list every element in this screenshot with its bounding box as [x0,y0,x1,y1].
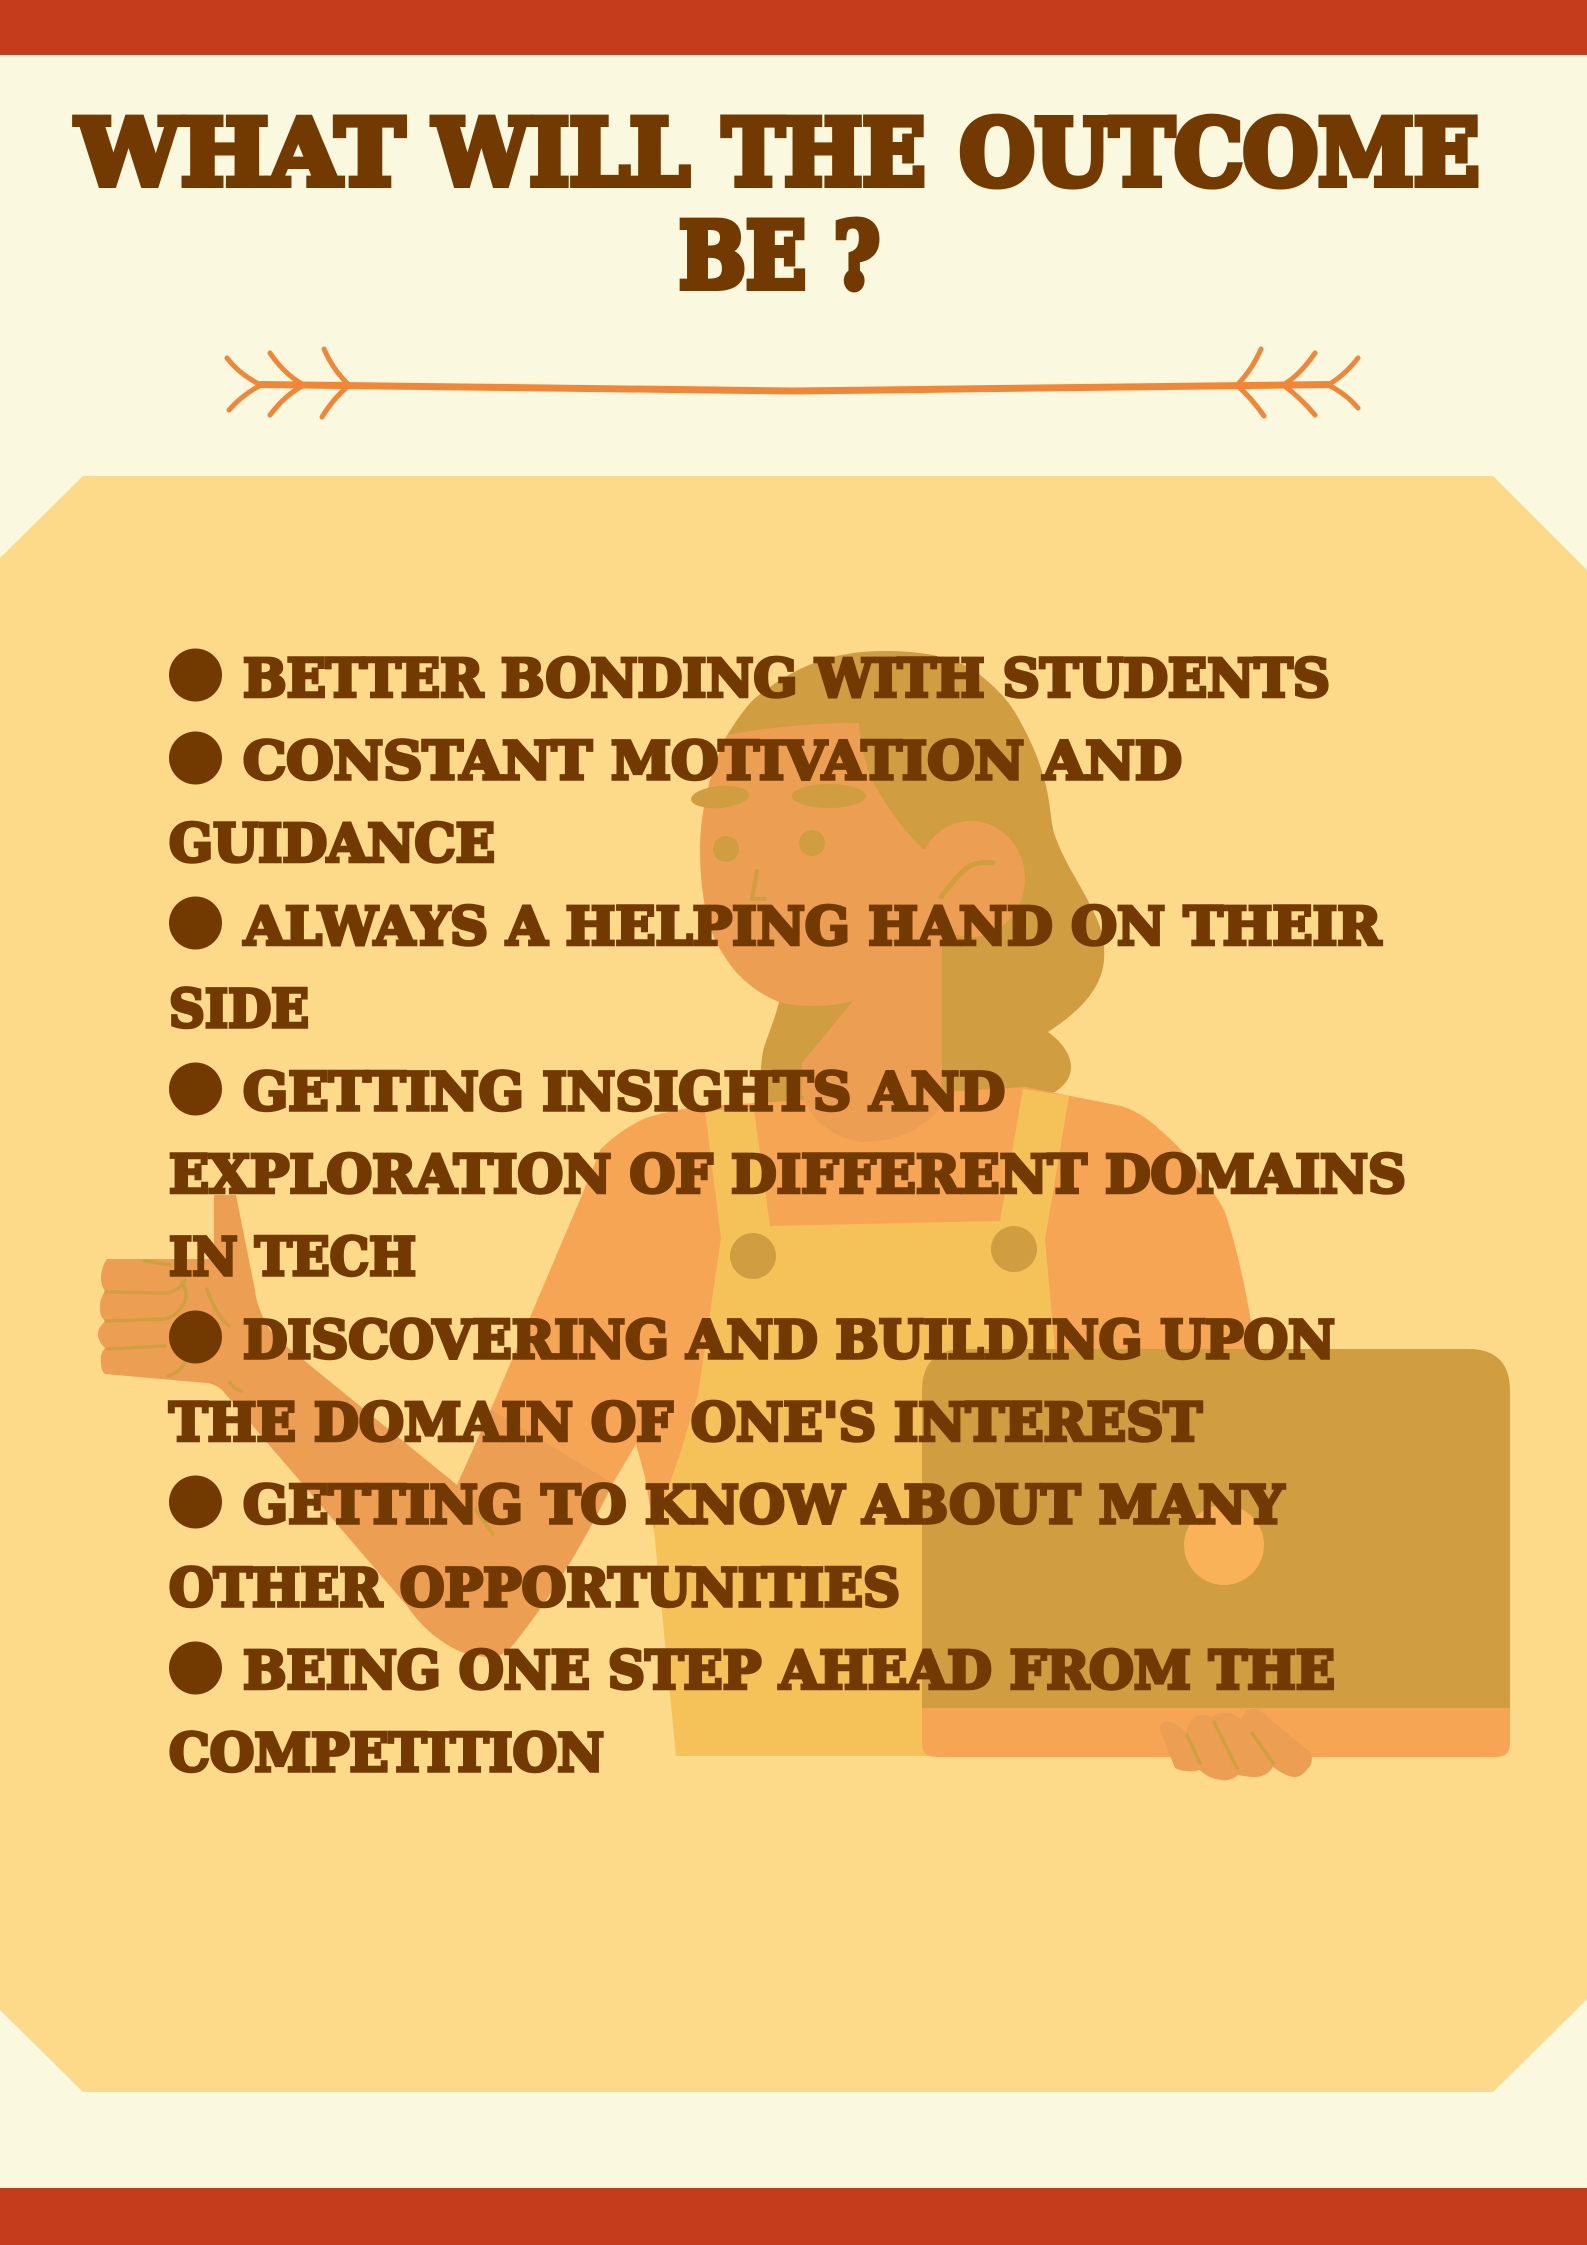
outcome list [169,648,1406,1784]
double-ended arrow divider [227,349,1358,417]
hair [725,651,1104,1110]
item: insights: EXPLORATION OF DIFFERENT DOMAINS [169,1144,1406,1206]
item: constant motivation: CONSTANT MOTIVATION AND [243,731,1182,792]
hand crease lines [106,1261,493,1534]
item: one step ahead: COMPETITION [169,1723,604,1784]
laptop [922,1349,1510,1757]
overalls [654,1089,1069,1756]
item: opportunities: GETTING TO KNOW ABOUT MANY [243,1475,1285,1536]
illustration: woman with laptop giving thumbs up [98,651,1510,1780]
overall buttons [730,1226,1037,1279]
ear [917,821,1025,937]
item: insights: IN TECH [169,1227,416,1288]
title: OUTCOME [960,100,1480,206]
item: discovering [169,1310,1335,1454]
title: THE [722,100,926,206]
hand holding laptop [1160,1709,1312,1780]
item: discovering: THE DOMAIN OF ONE'S INTEREST [169,1392,1202,1454]
shirt and upper arm [491,1087,1252,1530]
title [75,100,1480,310]
item: insights: GETTING INSIGHTS AND [243,1062,1005,1123]
title: WHAT [75,100,404,206]
item: opportunities [169,1475,1285,1619]
neck [802,990,942,1142]
item: helping hand [169,896,1382,1040]
facial features [690,784,993,899]
item: insights [169,1062,1406,1288]
item: better bonding: BETTER BONDING WITH STUDENTS [243,648,1330,710]
panel: octagonal background [0,476,1587,2092]
item: helping hand: ALWAYS A HELPING HAND ON THEIR [243,896,1382,958]
title: BE ? [679,204,880,310]
item: helping hand: SIDE [169,979,309,1040]
item: one step ahead [169,1640,1335,1784]
item: opportunities: OTHER OPPORTUNITIES [169,1558,900,1619]
item: one step ahead: BEING ONE STEP AHEAD FROM THE [243,1640,1335,1702]
item: constant motivation [169,731,1182,874]
item: discovering: DISCOVERING AND BUILDING UPON [243,1310,1335,1371]
face [700,723,942,1006]
bottom red bar [0,2188,1587,2245]
top red bar [0,0,1587,55]
forearm and thumbs-up hand [98,1195,613,1658]
title: WILL [433,100,690,206]
item: constant motivation: GUIDANCE [169,814,495,874]
